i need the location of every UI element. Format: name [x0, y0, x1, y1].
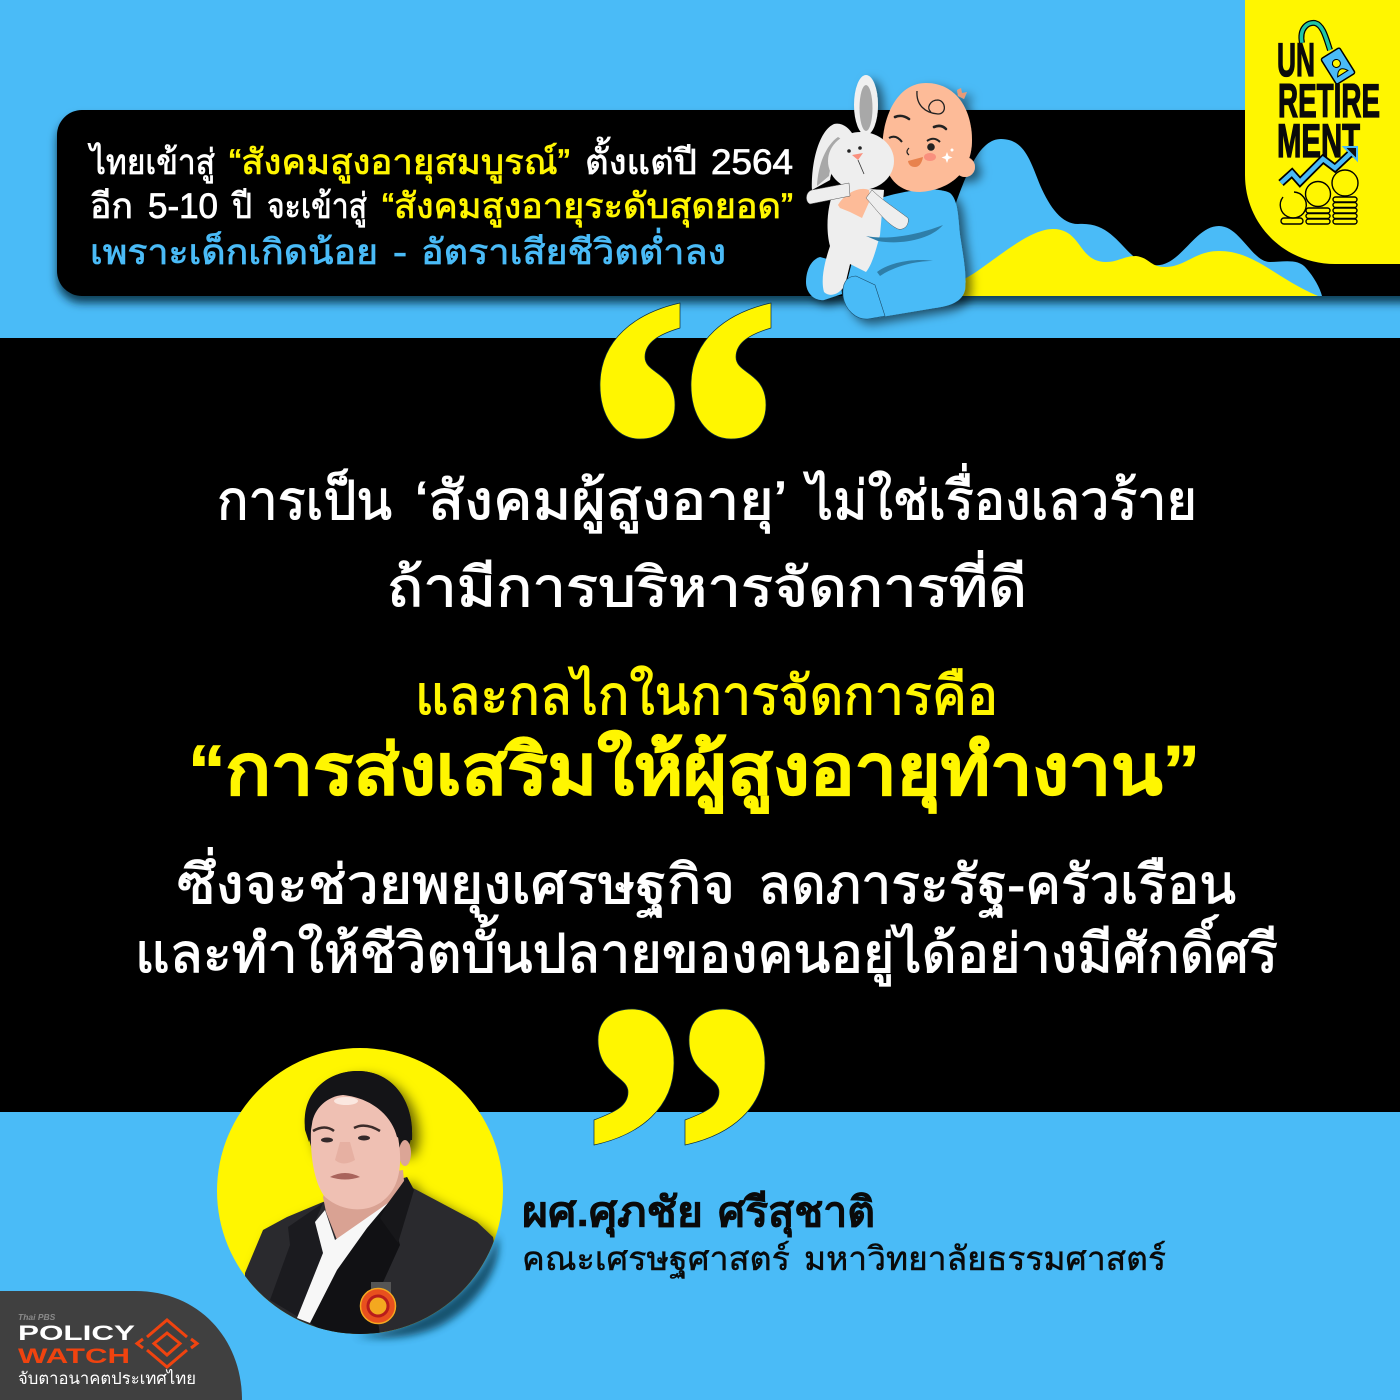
panel: main quote text: [135, 463, 1278, 986]
sparkles: [942, 152, 952, 163]
header line 1: [87, 136, 793, 183]
baby ear: [955, 157, 975, 177]
baby body: [845, 189, 966, 318]
logo: unretirement panel: [1245, 0, 1400, 264]
header line 3: [90, 228, 726, 272]
face: [311, 1094, 400, 1209]
policy watch tagline: จับตาอนาคตประเทศไทย: [18, 1369, 196, 1388]
header line 3: อัตราเสียชีวิตต่ำลง: [421, 228, 726, 272]
baby head: [883, 83, 972, 192]
bunny body: [823, 187, 884, 295]
illustration: baby hugging bunny: [806, 75, 975, 319]
logo wordmark: [1277, 33, 1380, 167]
quote line 6: และทำให้ชีวิตบั้นปลายของคนอยู่ได้อย่างมีศักดิ์ศรี: [135, 914, 1278, 986]
diamond emblem: [137, 1320, 197, 1367]
badge holder: [371, 1282, 391, 1294]
logo growth arrow: [1281, 147, 1357, 183]
header line 1: ไทยเข้าสู่: [87, 142, 215, 183]
speaker affiliation: [522, 1240, 1166, 1279]
header line 1: ตั้งแต่ปี: [585, 136, 697, 182]
logo wordmark: UN: [1277, 33, 1315, 86]
quote line 5: ลดภาระรัฐ-ครัวเรือน: [758, 855, 1236, 917]
forehead highlight: [334, 1097, 358, 1105]
logo: policy watch: [0, 1291, 242, 1400]
thai pbs label: Thai PBS: [18, 1312, 56, 1322]
portrait shadow on background: [355, 1235, 498, 1338]
neck: [323, 1170, 404, 1240]
eyebrows: [313, 1126, 380, 1131]
logo lanyard: [1301, 23, 1330, 50]
header line 3: -: [393, 233, 407, 272]
icon: opening quote mark: [600, 303, 771, 439]
jacket dark center panel: [310, 1203, 400, 1335]
baby big foot: [843, 276, 885, 319]
portrait backdrop circle: [217, 1048, 503, 1334]
speaker affiliation: มหาวิทยาลัยธรรมศาสตร์: [804, 1240, 1166, 1277]
baby arm crease: [866, 225, 943, 242]
header line 2: “สังคมสูงอายุระดับสุดยอด”: [382, 187, 793, 227]
quote line 5: ซึ่งจะช่วยพยุงเศรษฐกิจ: [177, 847, 735, 918]
header line 2: [90, 187, 793, 227]
quote line 1: การเป็น: [217, 469, 392, 531]
icon: closing quote mark: [594, 1009, 765, 1145]
collar and lapel: [388, 1177, 414, 1240]
policy wordmark: POLICY: [18, 1322, 135, 1345]
cheek: [924, 153, 936, 161]
header line 2: อีก: [90, 187, 133, 226]
wink and eye: [889, 137, 940, 142]
speaker name: [522, 1189, 875, 1238]
university badge: [360, 1288, 396, 1324]
quote line 2: ถ้ามีการบริหารจัดการที่ดี: [387, 550, 1027, 618]
portrait: speaker photo in yellow circle: [217, 1048, 503, 1340]
speaker name: ผศ.ศุภชัย: [522, 1189, 703, 1238]
baby far foot: [806, 257, 842, 300]
chart: mountain area shapes: [956, 139, 1322, 296]
shirt: [297, 1203, 388, 1323]
panel: header banner: [57, 110, 1400, 296]
logo coin stacks: [1280, 170, 1358, 224]
quote line 4 highlighted: “การส่งเสริมให้ผู้สูงอายุทำงาน”: [188, 729, 1200, 814]
header line 3: เพราะเด็กเกิดน้อย: [90, 231, 378, 272]
panel: header text: [87, 136, 793, 272]
bunny arm right: [866, 190, 908, 229]
baby hand: [838, 189, 870, 218]
hair tuft: [957, 88, 967, 99]
quote line 5: [177, 847, 1236, 918]
header line 1: “สังคมสูงอายุสมบูรณ์”: [229, 143, 570, 183]
bunny ears: [854, 75, 878, 135]
panel: black quote band: [0, 338, 1400, 1112]
bunny head: [828, 132, 894, 190]
jacket: [245, 1177, 497, 1340]
speaker name: ศรีสุชาติ: [718, 1189, 875, 1238]
bunny face: [847, 149, 851, 153]
bunny arm left: [806, 183, 850, 204]
hair back: [305, 1071, 412, 1150]
header line 1: 2564: [711, 143, 793, 182]
speaker affiliation: คณะเศรษฐศาสตร์: [522, 1240, 790, 1279]
eyebrows: [895, 116, 946, 129]
nose: [907, 148, 909, 155]
ear: [399, 1140, 411, 1166]
leg crease: [877, 260, 933, 276]
panel: blue footer: [0, 1112, 1400, 1400]
logo id card: [1321, 47, 1355, 85]
eyes: [321, 1138, 333, 1142]
quote line 1: [217, 463, 1197, 534]
header line 2: 5-10: [148, 187, 218, 226]
mouth: [330, 1173, 360, 1180]
watch wordmark: WATCH: [18, 1345, 130, 1368]
quote line 1: ไม่ใช่เรื่องเลวร้าย: [803, 463, 1197, 531]
hair front: [305, 1071, 412, 1142]
header line 2: จะเข้าสู่: [267, 187, 367, 227]
quote line 1: ‘สังคมผู้สูงอายุ’: [415, 471, 787, 534]
mouth: [908, 157, 923, 167]
quote line 3: และกลไกในการจัดการคือ: [415, 665, 998, 726]
jacket dark left panel: [270, 1203, 323, 1318]
baby curl hair: [917, 91, 944, 114]
portrait figure: [245, 1071, 497, 1340]
nose: [335, 1142, 355, 1164]
header line 2: ปี: [231, 187, 252, 226]
